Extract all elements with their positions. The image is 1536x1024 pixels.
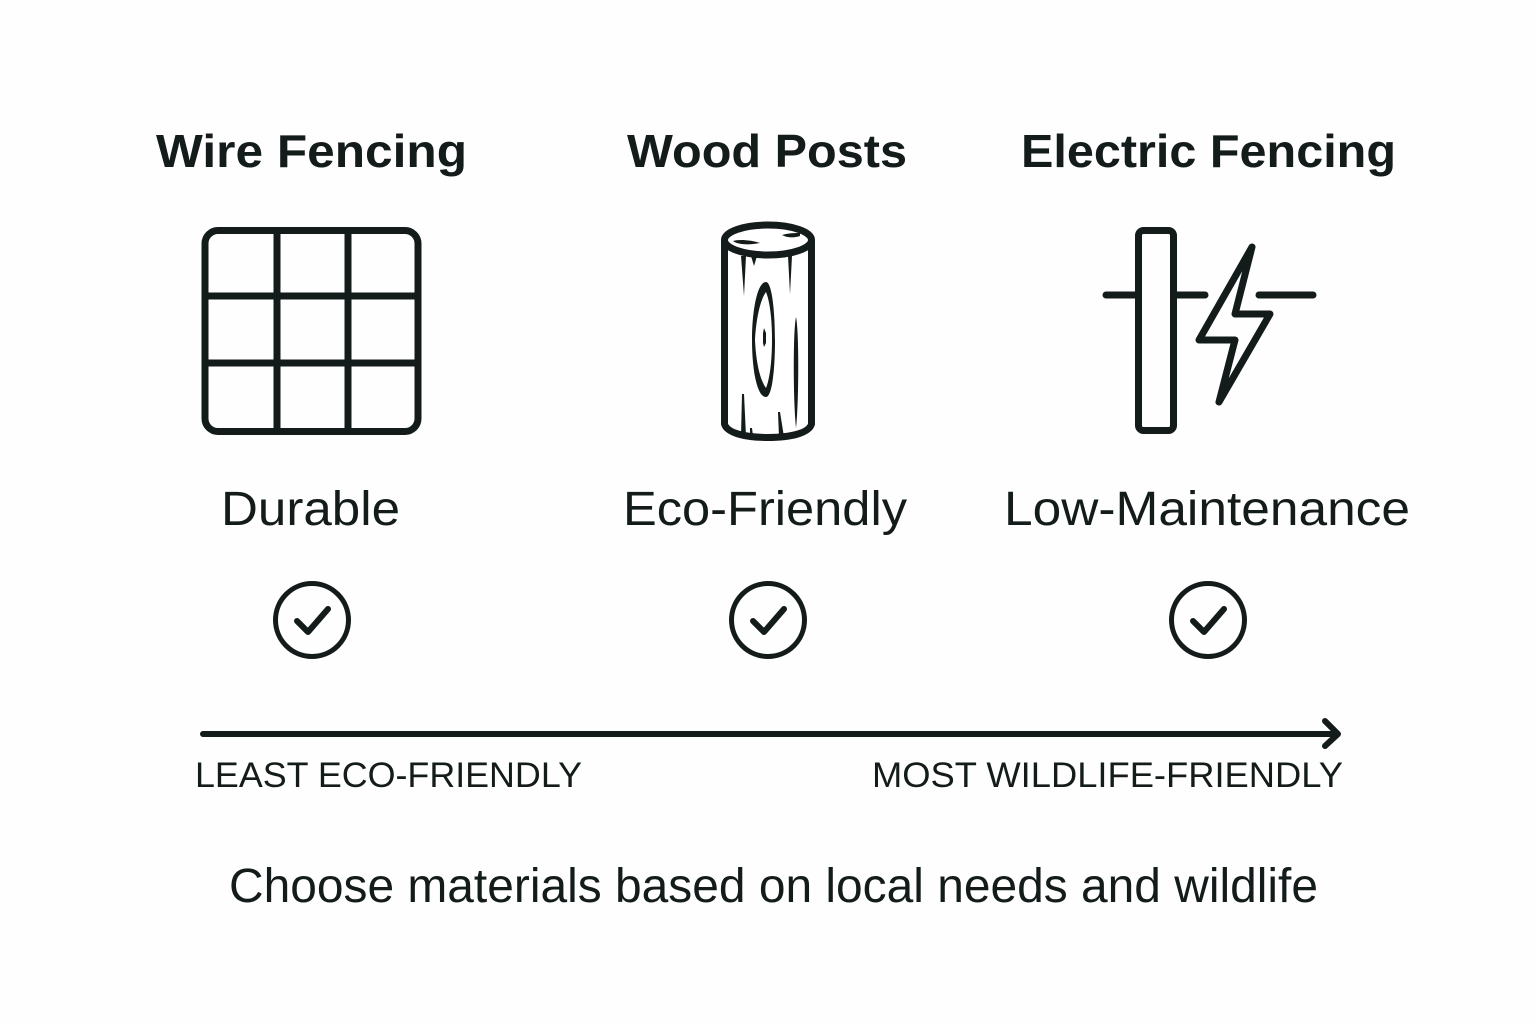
icon: check Low-Maintenance bbox=[1172, 584, 1244, 656]
icon: check Eco-Friendly bbox=[732, 584, 804, 656]
label: Low-Maintenance: Low-Maintenance bbox=[1004, 483, 1410, 536]
label: Durable: Durable bbox=[221, 483, 400, 536]
arrow: eco-friendliness scale bbox=[203, 721, 1338, 746]
heading: Wire Fencing: Wire Fencing bbox=[156, 125, 467, 177]
icon: check Durable bbox=[276, 584, 348, 656]
scale label: most wildlife-friendly: MOST WILDLIFE-FRIENDLY bbox=[872, 756, 1343, 795]
heading: Wood Posts: Wood Posts bbox=[627, 125, 907, 177]
icon: wire grid bbox=[205, 230, 418, 432]
icon: wood post bbox=[724, 225, 812, 438]
label: Eco-Friendly: Eco-Friendly bbox=[623, 483, 907, 536]
scale label: least eco-friendly: LEAST ECO-FRIENDLY bbox=[195, 756, 582, 795]
icon: electric fence post with bolt bbox=[1106, 230, 1313, 430]
caption: Choose materials based on local needs and wildlife bbox=[229, 860, 1318, 913]
heading: Electric Fencing: Electric Fencing bbox=[1021, 125, 1396, 177]
